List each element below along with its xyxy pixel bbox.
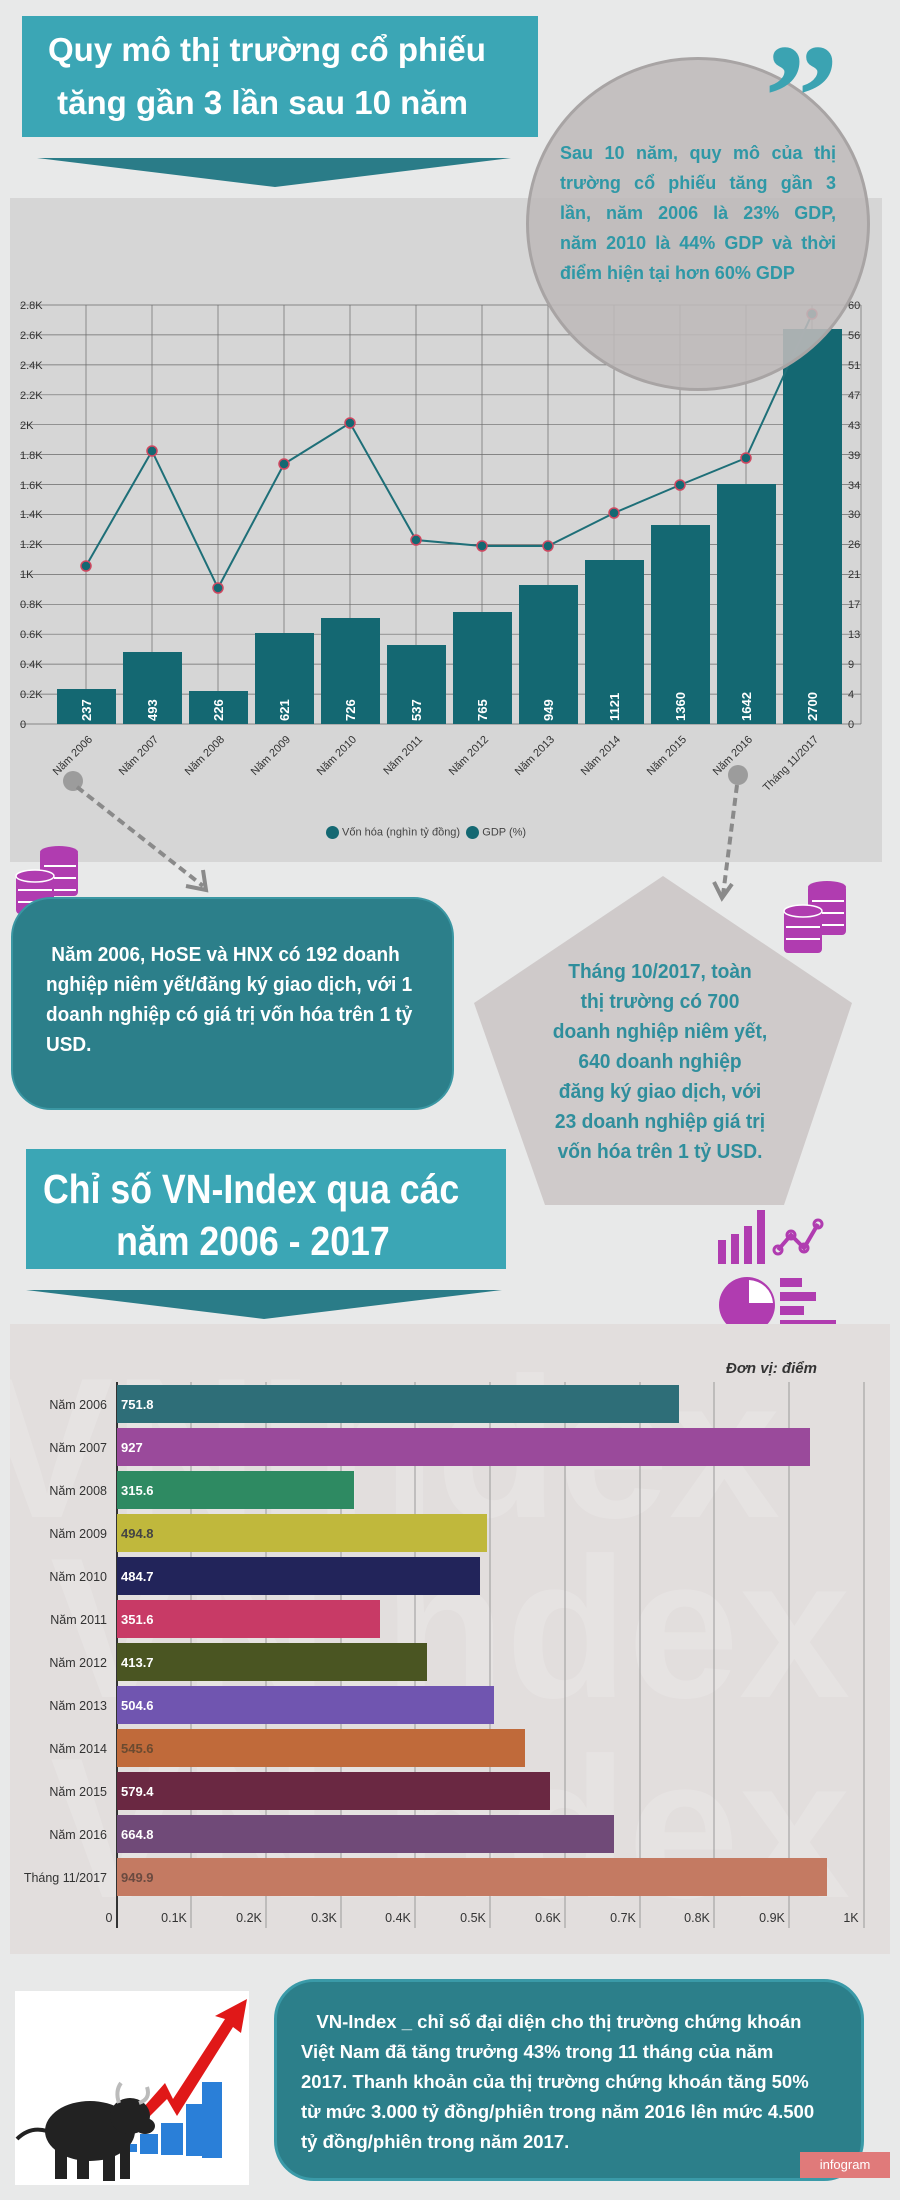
chart: market cap bars and GDP line: 2.8K [20,300,43,312]
icon: charts [718,1210,836,1324]
chart: VN-Index horizontal bars: 315.6 [121,1483,154,1498]
chart: market cap bars and GDP line: 1642 [739,692,754,721]
panel: 2006 note: USD. [46,1034,91,1056]
chart: market cap bars and GDP line: 13 [848,629,860,641]
text: quote body: Sau 10 năm, quy mô của thị [560,143,836,163]
chart: VN-Index horizontal bars: Năm 2014 [49,1742,107,1756]
text: quote body: trường cổ phiếu tăng gần 3 [560,173,836,193]
chart: VN-Index horizontal bars: Năm 2008 [49,1484,107,1498]
panel: VN-Index chart background: VNIndex [50,1517,850,1740]
text: pentagon body [553,961,767,1163]
chart: VN-Index horizontal bars: 484.7 [121,1569,154,1584]
text: pentagon body: doanh nghiệp niêm yết, [553,1021,767,1043]
panel: 2006 note: Năm 2006, HoSE và HNX có 192 doanh [51,944,400,966]
chart: market cap bars and GDP line: 2.4K [20,360,43,372]
text: pentagon body: đăng ký giao dịch, với [559,1081,761,1103]
chart: market cap bars and GDP line: Năm 2008 [183,734,227,778]
chart: market cap bars and GDP line: 1K [20,569,34,581]
chart: VN-Index horizontal bars: 0.7K [610,1911,637,1925]
chart: market cap bars and GDP line: 39 [848,450,860,462]
chart: market cap bars and GDP line: 17 [848,599,860,611]
title: market size: tăng gần 3 lần sau 10 năm [57,84,468,121]
chart: VN-Index horizontal bars: Năm 2013 [49,1699,107,1713]
panel: VN-Index chart background: VNIndex [50,1717,850,1940]
panel: VN-Index summary: tỷ đồng/phiên trong năm 2017. [301,2131,569,2152]
chart: market cap bars and GDP line: 21 [848,569,860,581]
icon: coins left [15,846,78,914]
text: quote body [560,143,836,283]
panel: VN-Index summary: Việt Nam đã tăng trưởng 43% trong 11 tháng của năm [301,2041,773,2062]
chart: market cap bars and GDP line: Năm 2011 [381,734,425,777]
chart: VN-Index horizontal bars: 0.6K [535,1911,562,1925]
chart: market cap bars and GDP line: 493 [145,699,160,721]
text: pentagon body: 640 doanh nghiệp [578,1051,742,1073]
chart: market cap bars and GDP line: 949 [541,699,556,721]
panel: VN-Index summary: từ mức 3.000 tỷ đồng/phiên trong năm 2016 lên mức 4.500 [301,2101,814,2122]
chart: market cap bars and GDP line: 621 [277,699,292,721]
panel: 2017 pentagon [474,876,852,1205]
chart: VN-Index horizontal bars [24,1382,864,1928]
title: VN-Index: năm 2006 - 2017 [116,1218,390,1264]
chart: market cap bars and GDP line: 0.4K [20,659,43,671]
arrow: title pointer 1 [37,158,511,187]
legend: Vốn hóa (nghìn tỷ đồng) GDP (%) [342,826,526,838]
chart: VN-Index horizontal bars: 0.3K [311,1911,338,1925]
chart: market cap bars and GDP line: 237 [79,699,94,721]
chart: VN-Index horizontal bars: 751.8 [121,1397,154,1412]
chart: market cap bars and GDP line: 47 [848,390,860,402]
panel: 2006 note: doanh nghiệp có giá trị vốn hóa trên 1 tỷ [46,1004,412,1026]
text: quote body: lần, năm 2006 là 23% GDP, [560,203,836,223]
title: market size [22,16,538,137]
chart: market cap bars and GDP line: 2.6K [20,330,43,342]
chart: market cap bars and GDP line: 26 [848,539,860,551]
chart: VN-Index horizontal bars: Năm 2015 [49,1785,107,1799]
chart: market cap bars and GDP line: 1.4K [20,509,43,521]
chart: VN-Index horizontal bars: 0.8K [684,1911,711,1925]
chart: market cap bars and GDP line: Năm 2010 [315,734,359,778]
panel: chart 1 background [10,198,882,862]
panel: VN-Index summary [274,1979,864,2181]
panel: VN-Index chart background [10,1324,890,1954]
chart: market cap bars and GDP line: 0 [848,719,854,731]
chart: VN-Index horizontal bars: 0 [106,1911,113,1925]
chart: market cap bars and GDP line: 0.2K [20,689,43,701]
chart: VN-Index horizontal bars: 0.4K [385,1911,412,1925]
chart: VN-Index horizontal bars: 927 [121,1440,143,1455]
chart: VN-Index horizontal bars: Năm 2006 [49,1398,107,1412]
chart: market cap bars and GDP line: 2700 [805,692,820,721]
arrow: title pointer 2 [26,1290,502,1319]
chart: market cap bars and GDP line: Tháng 11/2017 [761,734,821,794]
panel: 2006 note: nghiệp niêm yết/đăng ký giao dịch, với 1 [46,974,412,996]
chart: market cap bars and GDP line: 34 [848,480,860,492]
title: VN-Index [26,1149,506,1269]
text: quote body: năm 2010 là 44% GDP và thời [560,233,836,253]
panel: 2006 note [11,897,454,1110]
chart: market cap bars and GDP line: Năm 2013 [513,734,557,778]
chart: market cap bars and GDP line: 30 [848,509,860,521]
icon: quote mark: ” [764,14,839,180]
chart: VN-Index horizontal bars: 413.7 [121,1655,154,1670]
chart: VN-Index horizontal bars: Năm 2007 [49,1441,107,1455]
text: quote body: điểm hiện tại hơn 60% GDP [560,263,795,283]
chart: VN-Index horizontal bars: Năm 2016 [49,1828,107,1842]
chart: VN-Index horizontal bars: 579.4 [121,1784,154,1799]
chart: market cap bars and GDP line: 537 [409,699,424,721]
chart: VN-Index horizontal bars: 0.1K [161,1911,188,1925]
chart: market cap bars and GDP line: 56 [848,330,860,342]
text: pentagon body: Tháng 10/2017, toàn [568,961,752,983]
chart: market cap bars and GDP line: 726 [343,699,358,721]
chart: market cap bars and GDP line: Năm 2009 [249,734,293,778]
chart: market cap bars and GDP line: Năm 2014 [579,734,623,778]
badge: infogram [800,2152,890,2178]
callout circle: quote [526,57,870,391]
chart: market cap bars and GDP line: Năm 2015 [645,734,689,778]
chart: VN-Index horizontal bars: 0.5K [460,1911,487,1925]
chart: market cap bars and GDP line: 2.2K [20,390,43,402]
chart: VN-Index horizontal bars: Năm 2009 [49,1527,107,1541]
image: bull with rising chart [15,1991,249,2185]
chart: VN-Index horizontal bars: Năm 2010 [49,1570,107,1584]
chart: VN-Index horizontal bars: Tháng 11/2017 [24,1871,107,1885]
badge: infogram: infogram [820,2157,870,2172]
title: VN-Index: Chỉ số VN-Index qua các [43,1166,459,1212]
chart: market cap bars and GDP line [20,300,862,794]
chart: market cap bars and GDP line: Năm 2007 [117,734,161,778]
chart: market cap bars and GDP line: 1360 [673,692,688,721]
chart: VN-Index horizontal bars: Năm 2012 [49,1656,107,1670]
chart: VN-Index horizontal bars: 949.9 [121,1870,154,1885]
chart: market cap bars and GDP line: Năm 2012 [447,734,491,778]
chart: VN-Index horizontal bars: 545.6 [121,1741,154,1756]
chart: market cap bars and GDP line: Năm 2016 [711,734,755,778]
chart: market cap bars and GDP line: 0.6K [20,629,43,641]
icon: coins right [783,881,846,953]
text: pentagon body: thị trường có 700 [581,991,739,1013]
panel: VN-Index summary: 2017. Thanh khoản của thị trường chứng khoán tăng 50% [301,2071,809,2092]
chart: market cap bars and GDP line: 1.2K [20,539,43,551]
chart: market cap bars and GDP line: 2K [20,420,34,432]
chart: VN-Index horizontal bars: 504.6 [121,1698,154,1713]
chart: VN-Index horizontal bars: 0.2K [236,1911,263,1925]
chart: VN-Index horizontal bars: 664.8 [121,1827,154,1842]
chart: VN-Index horizontal bars: 1K [843,1911,859,1925]
chart: market cap bars and GDP line: 1.8K [20,450,43,462]
chart: market cap bars and GDP line: 0 [20,719,26,731]
chart: market cap bars and GDP line: Năm 2006 [51,734,95,778]
chart: VN-Index horizontal bars: 494.8 [121,1526,154,1541]
text: unit: Đơn vị: điểm [726,1360,817,1377]
chart: market cap bars and GDP line: 60 [848,300,860,312]
chart: market cap bars and GDP line: 0.8K [20,599,43,611]
chart: market cap bars and GDP line: 1121 [607,693,622,721]
panel: VN-Index summary: VN-Index _ chỉ số đại diện cho thị trường chứng khoán [316,2011,801,2032]
chart: market cap bars and GDP line: 43 [848,420,860,432]
chart: VN-Index horizontal bars: 351.6 [121,1612,154,1627]
chart: market cap bars and GDP line: 765 [475,699,490,721]
text: pentagon body: vốn hóa trên 1 tỷ USD. [558,1141,762,1163]
chart: market cap bars and GDP line: 4 [848,689,854,701]
title: market size: Quy mô thị trường cổ phiếu [48,31,486,68]
chart: VN-Index horizontal bars: Năm 2011 [50,1613,107,1627]
chart: VN-Index horizontal bars: 0.9K [759,1911,786,1925]
chart: market cap bars and GDP line: 226 [211,699,226,721]
chart: market cap bars and GDP line: 51 [848,360,860,372]
text: pentagon body: 23 doanh nghiệp giá trị [555,1111,765,1133]
arrows: dashed connectors [63,765,748,902]
chart: market cap bars and GDP line: 1.6K [20,480,43,492]
chart: market cap bars and GDP line: 9 [848,659,854,671]
